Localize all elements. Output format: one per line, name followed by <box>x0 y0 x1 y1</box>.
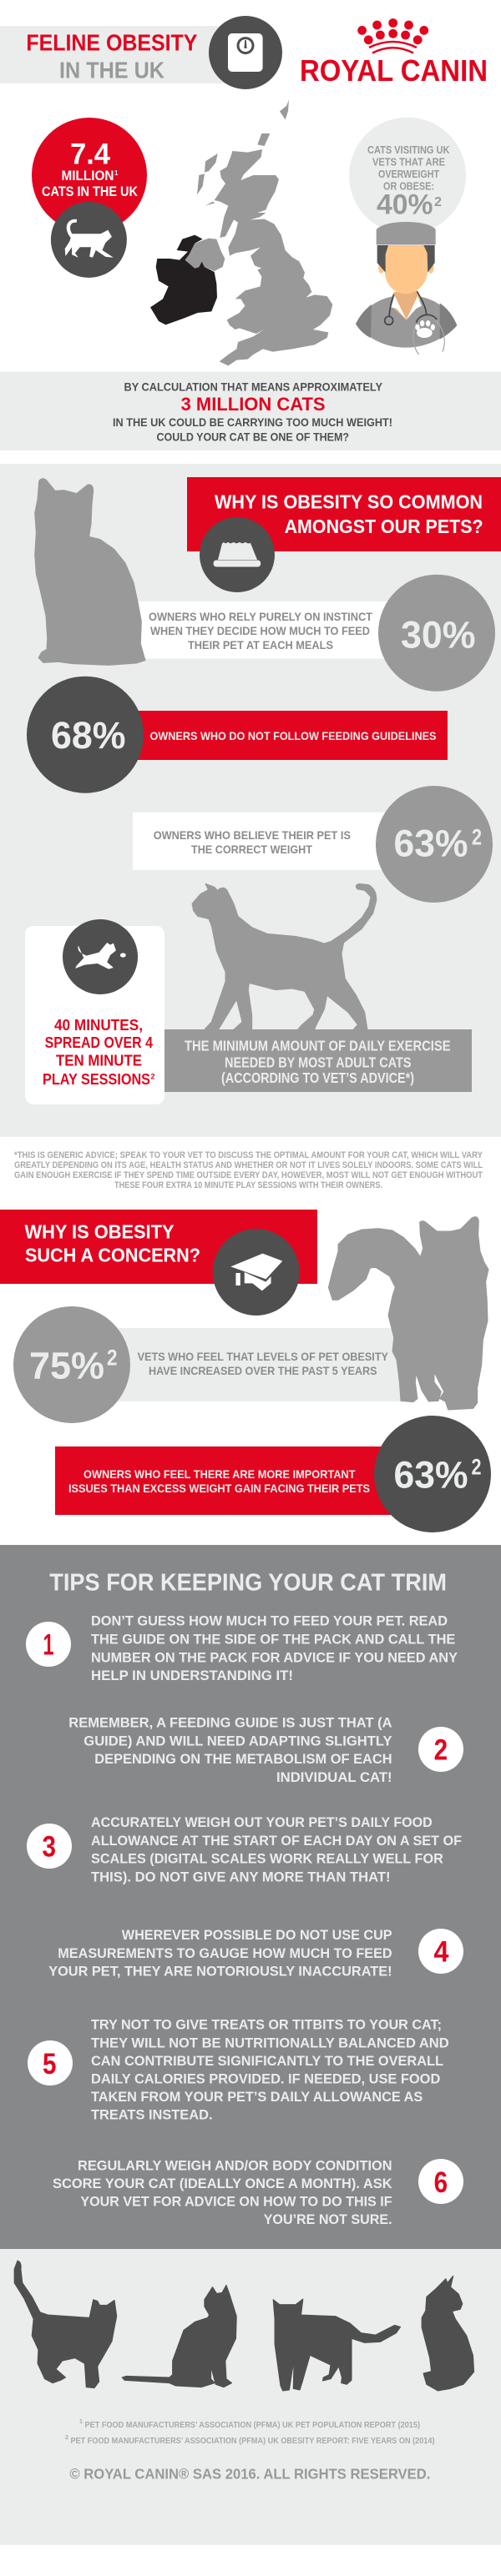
callout: 7.4 million cats: 7.4 <box>70 138 111 170</box>
stat: 68 percent <box>27 677 448 793</box>
stat: 30 percent <box>137 575 495 692</box>
callout: 40 minutes play: SPREAD OVER 4 <box>45 1034 154 1051</box>
tip 5: TRY NOT TO GIVE TREATS OR TITBITS TO YOUR CAT; <box>91 2016 442 2032</box>
callout: 40 minutes play <box>25 919 164 1104</box>
tip 3 <box>27 1814 462 1884</box>
tip 5: TREATS INSTEAD. <box>91 2106 212 2122</box>
stat: 63 percent correct weight <box>133 786 493 903</box>
icon: fluffy cat <box>328 1217 488 1410</box>
icon: four cat silhouettes <box>14 2261 474 2391</box>
panel: 3 million cats: COULD YOUR CAT BE ONE OF THEM? <box>157 430 349 444</box>
panel: footer <box>0 2249 501 2545</box>
heading: SUCH A CONCERN? <box>25 1245 200 1266</box>
tip 3: ACCURATELY WEIGH OUT YOUR PET’S DAILY FOOD <box>91 1814 433 1830</box>
text block: references: PET FOOD MANUFACTURERS’ ASSOCIATION (PFMA) UK OBESITY REPORT: FIVE YEARS ON (2014) <box>70 2436 434 2446</box>
panel: why is obesity so common <box>0 464 501 1137</box>
callout: 40 percent overweight: CATS VISITING UK <box>367 143 450 156</box>
callout: minimum daily exercise <box>164 1029 472 1092</box>
stat: 63 percent other issues: ISSUES THAN EXCESS WEIGHT GAIN FACING THEIR PETS <box>68 1482 370 1495</box>
stat: 63 percent other issues: OWNERS WHO FEEL THERE ARE MORE IMPORTANT <box>84 1467 356 1481</box>
text block: references <box>65 2419 434 2446</box>
callout: 7.4 million cats: CATS IN THE UK <box>42 184 138 199</box>
tip 4 <box>48 1927 463 1979</box>
tip 6: REGULARLY WEIGH AND/OR BODY CONDITION <box>78 2157 392 2173</box>
tip 1 <box>26 1613 458 1683</box>
tip 6: 6 <box>434 2166 448 2199</box>
callout: minimum daily exercise: NEEDED BY MOST ADULT CATS <box>225 1054 412 1070</box>
text block: references: PET FOOD MANUFACTURERS’ ASSOCIATION (PFMA) UK PET POPULATION REPORT (2015) <box>85 2420 420 2430</box>
tip 1: 1 <box>43 1628 53 1661</box>
icon: sitting cat <box>35 479 145 665</box>
tip 1: THE GUIDE ON THE SIDE OF THE PACK AND CALL THE <box>91 1632 455 1648</box>
heading: tips: TIPS FOR KEEPING YOUR CAT TRIM <box>49 1570 447 1597</box>
stat: 75 percent: VETS WHO FEEL THAT LEVELS OF PET OBESITY <box>138 1350 389 1363</box>
tip 2: INDIVIDUAL CAT! <box>276 1769 392 1785</box>
heading: WHY IS OBESITY SO COMMON <box>215 491 483 513</box>
tip 2: DEPENDING ON THE METABOLISM OF EACH <box>94 1751 392 1767</box>
icon: mortarboard <box>213 1229 300 1316</box>
callout: 40 percent overweight: 2 <box>434 195 442 209</box>
panel: tips <box>0 1545 501 2249</box>
tip 4: MEASUREMENTS TO GAUGE HOW MUCH TO FEED <box>58 1945 392 1961</box>
tip 1: HELP IN UNDERSTANDING IT! <box>91 1668 293 1683</box>
tip 1: NUMBER ON THE PACK FOR ADVICE IF YOU NEED ANY <box>91 1650 458 1666</box>
callout: minimum daily exercise: THE MINIMUM AMOUNT OF DAILY EXERCISE <box>185 1037 451 1054</box>
callout: 40 percent overweight <box>349 118 466 234</box>
stat: 30 percent: OWNERS WHO RELY PURELY ON INSTINCT <box>149 610 372 623</box>
tip 5: DAILY CALORIES PROVIDED. IF NEEDED, USE FOOD <box>91 2070 440 2086</box>
title: FELINE OBESITY <box>26 30 197 56</box>
tip 3: SCALES (DIGITAL SCALES WORK REALLY WELL FOR <box>91 1850 443 1866</box>
tip 5: THEY WILL NOT BE NUTRITIONALLY BALANCED AND <box>91 2035 449 2050</box>
callout: 40 minutes play: PLAY SESSIONS <box>43 1070 150 1088</box>
callout: 7.4 million cats <box>32 118 147 233</box>
title band <box>0 26 225 83</box>
stat: 68 percent: 68% <box>51 714 125 757</box>
stat: 63 percent other issues: 63% <box>394 1453 468 1496</box>
callout: 40 minutes play: 40 MINUTES, <box>54 1016 143 1034</box>
tip 2: 2 <box>434 1733 448 1766</box>
stat: 75 percent: 2 <box>107 1346 117 1371</box>
title: IN THE UK <box>59 57 164 83</box>
tip 6: YOU’RE NOT SURE. <box>264 2211 392 2227</box>
callout: 40 minutes play: TEN MINUTE <box>56 1052 142 1069</box>
tip 3: 3 <box>42 1830 56 1863</box>
tip 5: 5 <box>43 2048 57 2080</box>
icon: vet <box>356 222 457 355</box>
text block: disclaimer: THESE FOUR EXTRA 10 MINUTE PLAY SESSIONS WITH THEIR OWNERS. <box>114 1180 382 1190</box>
text block: references: 2 <box>65 2435 68 2441</box>
text: copyright: © ROYAL CANIN® SAS 2016. ALL RIGHTS RESERVED. <box>69 2466 430 2483</box>
tip 3: THIS). DO NOT GIVE ANY MORE THAN THAT! <box>91 1869 391 1884</box>
tip 5: CAN CONTRIBUTE SIGNIFICANTLY TO THE OVERALL <box>91 2053 443 2069</box>
tip 1: DON’T GUESS HOW MUCH TO FEED YOUR PET. READ <box>91 1613 448 1629</box>
text block: references: 1 <box>79 2419 83 2425</box>
tip 6: YOUR VET FOR ADVICE ON HOW TO DO THIS IF <box>80 2193 392 2209</box>
panel: 3 million cats: IN THE UK COULD BE CARRYING TOO MUCH WEIGHT! <box>113 415 392 429</box>
heading: AMONGST OUR PETS? <box>285 516 483 537</box>
tip 6: SCORE YOUR CAT (IDEALLY ONCE A MONTH). ASK <box>53 2176 392 2191</box>
stat: 75 percent: HAVE INCREASED OVER THE PAST 5 YEARS <box>149 1364 377 1377</box>
tip 5 <box>28 2016 449 2122</box>
callout: minimum daily exercise: (ACCORDING TO VET’S ADVICE*) <box>221 1069 414 1086</box>
map: UK and Ireland <box>150 99 332 365</box>
stat: 30 percent: THEIR PET AT EACH MEALS <box>188 638 333 652</box>
logo: Royal Canin: ROYAL CANIN <box>300 53 488 88</box>
title <box>26 30 197 83</box>
text block: disclaimer <box>14 1150 483 1190</box>
tip 2: GUIDE) AND WILL NEED ADAPTING SLIGHTLY <box>84 1733 392 1749</box>
tip 2: REMEMBER, A FEEDING GUIDE IS JUST THAT (A <box>68 1715 392 1731</box>
panel: why is obesity such a concern <box>0 1210 491 1532</box>
panel: 3 million cats: BY CALCULATION THAT MEANS APPROXIMATELY <box>124 380 383 394</box>
callout: 40 percent overweight: 40% <box>377 189 433 220</box>
callout: 7.4 million cats: 1 <box>114 169 119 177</box>
tip 4: YOUR PET, THEY ARE NOTORIOUSLY INACCURATE! <box>48 1963 392 1979</box>
stat: 68 percent: OWNERS WHO DO NOT FOLLOW FEEDING GUIDELINES <box>150 729 436 742</box>
stat: 63 percent correct weight: 2 <box>472 824 482 849</box>
stat: 63 percent other issues: 2 <box>471 1455 481 1480</box>
tip 6 <box>53 2157 463 2227</box>
tip 2 <box>68 1715 463 1785</box>
stat: 63 percent correct weight: THE CORRECT WEIGHT <box>191 843 312 856</box>
icon: walking cat <box>51 202 127 278</box>
tip 5: TAKEN FROM YOUR PET’S DAILY ALLOWANCE AS <box>91 2089 423 2105</box>
callout: 40 percent overweight: OVERWEIGHT <box>378 168 439 180</box>
stat: 63 percent other issues <box>55 1416 491 1532</box>
icon: walking cat silhouette <box>192 883 377 1029</box>
callout: 40 percent overweight: VETS THAT ARE <box>372 155 445 169</box>
panel: 3 million cats <box>0 372 501 450</box>
callout: 7.4 million cats: MILLION <box>62 168 114 184</box>
stat: 75 percent <box>13 1306 402 1423</box>
stat: 63 percent correct weight: 63% <box>394 823 468 865</box>
tip 4: WHEREVER POSSIBLE DO NOT USE CUP <box>122 1927 392 1943</box>
tip 4: 4 <box>434 1935 449 1968</box>
heading: WHY IS OBESITY <box>25 1221 175 1243</box>
icon: weighing scale <box>209 16 282 89</box>
stat: 30 percent: WHEN THEY DECIDE HOW MUCH TO FEED <box>150 624 370 637</box>
stat: 63 percent correct weight: OWNERS WHO BELIEVE THEIR PET IS <box>154 828 351 842</box>
stat: 30 percent: 30% <box>401 614 476 657</box>
heading <box>187 477 501 551</box>
logo: Royal Canin <box>300 18 488 88</box>
panel: header <box>0 16 488 89</box>
heading <box>0 1210 317 1284</box>
callout: 40 percent overweight: OR OBESE: <box>383 179 434 192</box>
icon: food bowl <box>200 517 275 592</box>
callout: 40 minutes play: 2 <box>150 1073 155 1081</box>
stat: 75 percent: 75% <box>29 1344 104 1386</box>
panel: 3 million cats: 3 MILLION CATS <box>181 394 326 415</box>
tip 3: ALLOWANCE AT THE START OF EACH DAY ON A SET OF <box>91 1833 462 1849</box>
